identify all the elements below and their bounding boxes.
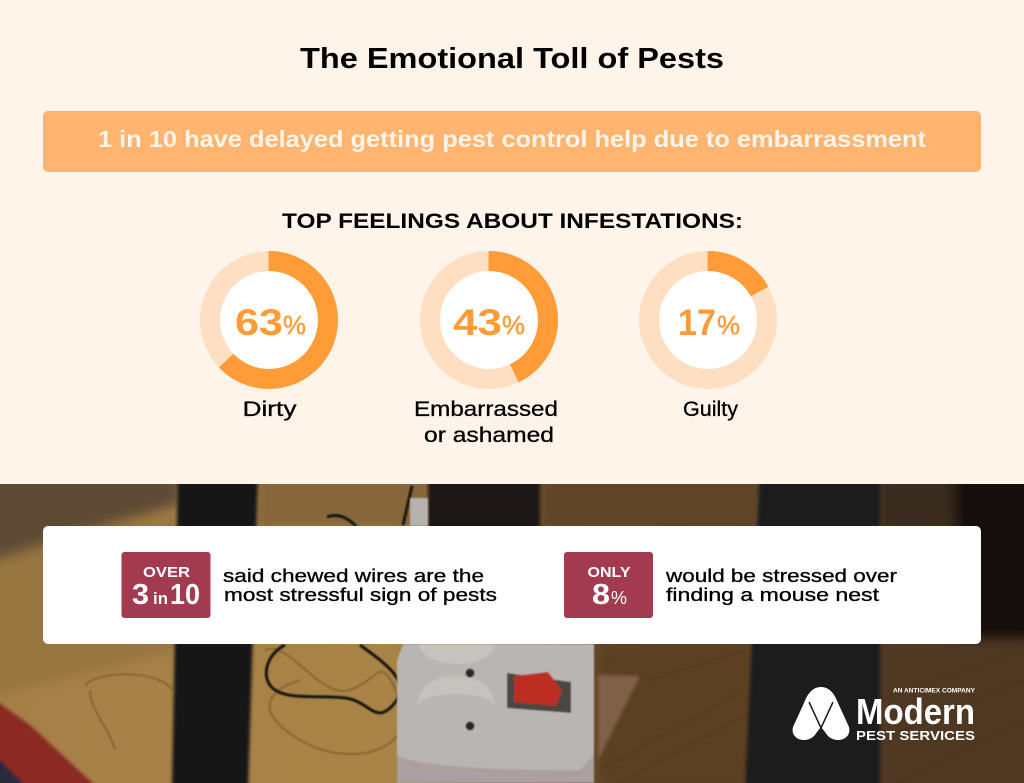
logo mark	[793, 687, 849, 740]
donut: embarrassed 43%	[414, 261, 558, 447]
logo: Modern Pest Services	[793, 687, 975, 743]
logo: Modern Pest Services: PEST SERVICES	[856, 728, 975, 743]
page background	[0, 0, 1024, 484]
donut: guilty 17%: Guilty	[683, 398, 739, 421]
title: The Emotional Toll of Pests	[300, 43, 724, 75]
section heading: TOP FEELINGS ABOUT INFESTATIONS:	[282, 210, 743, 233]
donut: guilty 17%: %	[717, 310, 740, 340]
donut: guilty 17%: 17	[678, 302, 716, 343]
donut: dirty 63%: Dirty	[242, 398, 297, 421]
banner: delayed help: 1 in 10 have delayed getting pest control help due to embarrassment	[98, 126, 926, 152]
stat: only 8%: would be stressed over	[665, 566, 897, 586]
logo: Modern Pest Services: AN ANTICIMEX COMPANY	[893, 688, 975, 694]
white info panel	[43, 526, 981, 644]
donut: embarrassed 43%: or ashamed	[424, 424, 554, 447]
stat: over 3 in 10: in	[153, 589, 168, 608]
wood grain	[600, 650, 1024, 783]
stat: over 3 in 10: OVER	[143, 564, 190, 581]
background photo: power strip on wooden floor	[0, 470, 1024, 783]
stat: over 3 in 10: most stressful sign of pests	[224, 585, 497, 605]
banner: delayed help	[43, 111, 981, 172]
logo: Modern Pest Services: Modern	[856, 691, 975, 732]
stat: only 8%: 8	[592, 579, 610, 611]
donut: embarrassed 43%: 43	[453, 302, 502, 343]
power strip	[397, 498, 594, 783]
stat: only 8%: ONLY	[588, 564, 630, 581]
stat: over 3 in 10	[122, 552, 497, 618]
donut: dirty 63%	[210, 261, 328, 421]
donut: embarrassed 43%: Embarrassed	[414, 398, 558, 421]
donut: dirty 63%: 63	[235, 302, 283, 343]
stat: over 3 in 10: 10	[170, 579, 200, 611]
donut: embarrassed 43%: %	[502, 310, 525, 340]
donut: dirty 63%: %	[283, 310, 306, 340]
stat: over 3 in 10: 3	[132, 579, 149, 611]
wires	[266, 486, 412, 713]
stat: over 3 in 10: said chewed wires are the	[223, 566, 484, 586]
stat: only 8%: %	[611, 588, 627, 608]
stat: only 8%	[564, 552, 897, 618]
donut: guilty 17%	[649, 261, 767, 421]
stat: only 8%: finding a mouse nest	[666, 585, 879, 605]
